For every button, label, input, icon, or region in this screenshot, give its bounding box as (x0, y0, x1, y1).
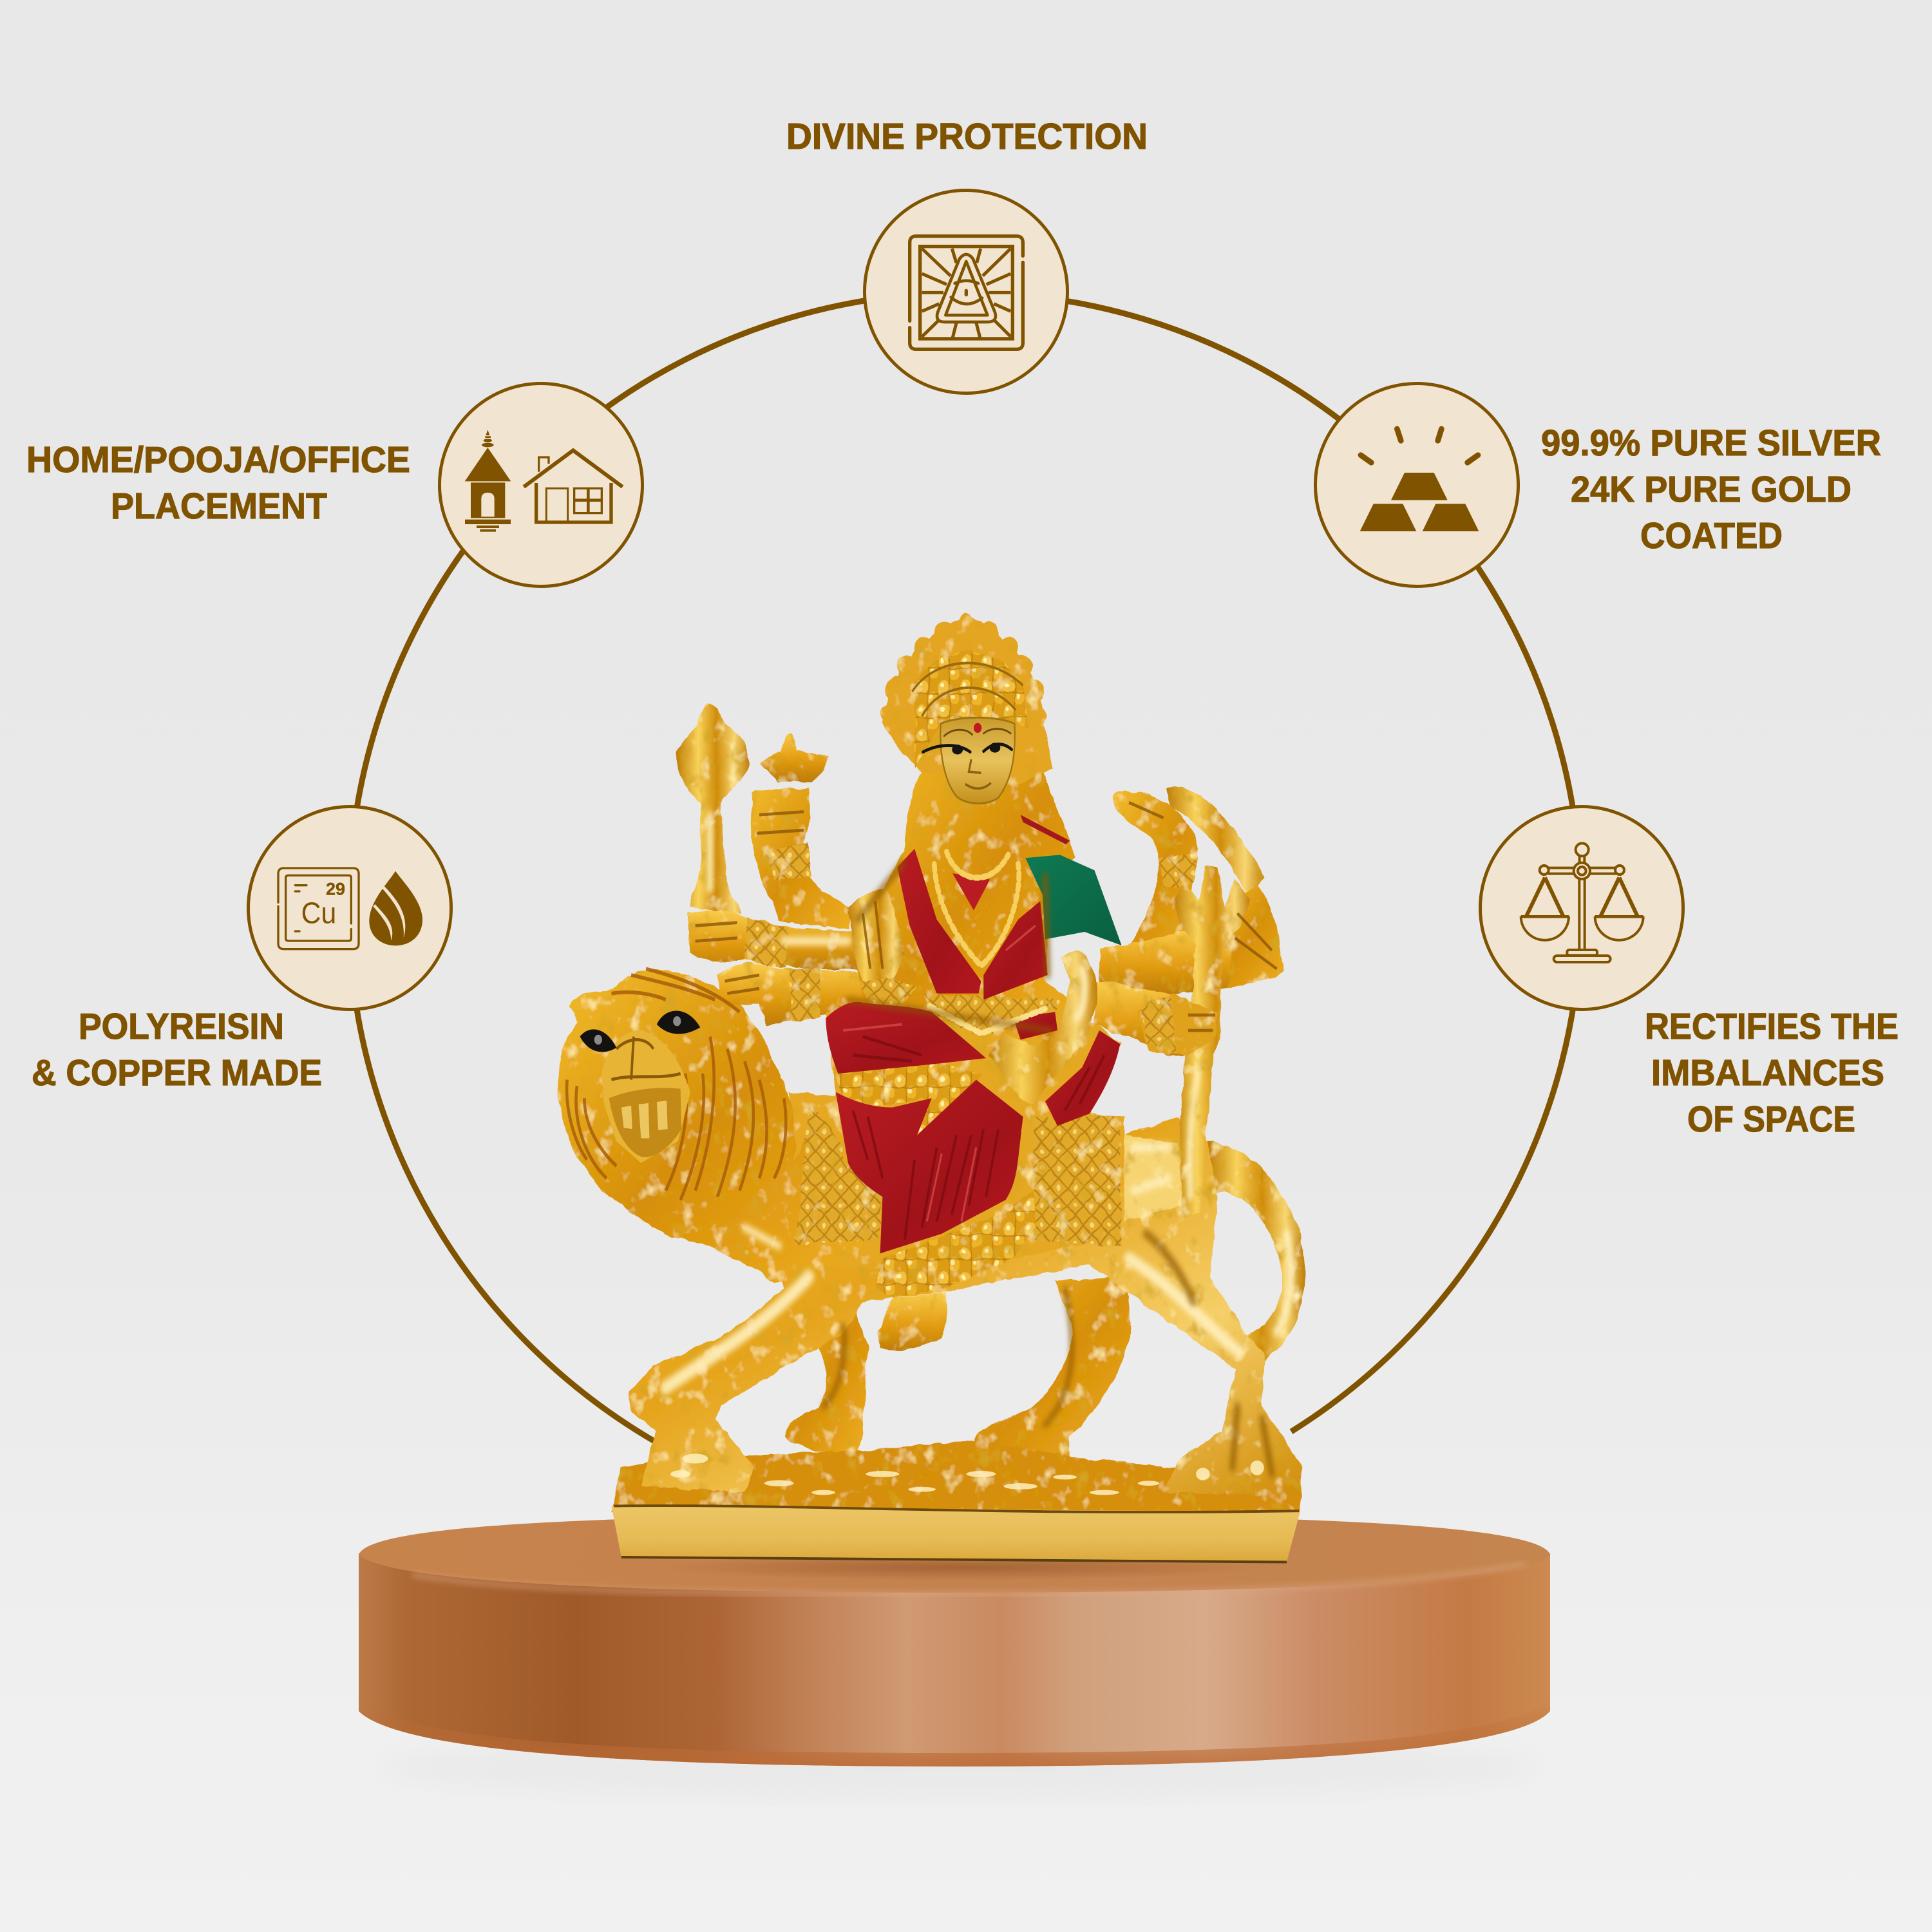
lower hand on trident (1137, 994, 1218, 1055)
arm bangles (744, 842, 1198, 1054)
icon badge: copper element and resin drop: 29 (326, 879, 345, 898)
pedestal side (359, 1553, 1550, 1766)
lion mane and head (558, 970, 863, 1283)
lion muzzle (601, 1030, 690, 1163)
heading: placement (26, 439, 410, 527)
heading: rectifies: OF SPACE (1687, 1099, 1855, 1140)
heading: material: POLYREISIN (79, 1006, 284, 1047)
torso and veil (857, 759, 1075, 1037)
saddle hip shine (1124, 1135, 1183, 1222)
heading: purity: 99.9% PURE SILVER (1541, 422, 1881, 464)
right horizontal arm (1099, 929, 1233, 995)
goddess lower underlay (826, 999, 1122, 1298)
heading: divine protection: DIVINE PROTECTION (786, 116, 1148, 157)
saree tail (833, 1061, 981, 1141)
heading: placement: PLACEMENT (111, 486, 327, 527)
pedestal (359, 1515, 1550, 1800)
crown scalloped halo (881, 614, 1052, 784)
heading: material (32, 1006, 322, 1094)
connecting ring (348, 292, 1581, 1442)
heading: rectifies: IMBALANCES (1651, 1052, 1884, 1094)
eyes and brows (923, 729, 1012, 754)
arm holding lamp (751, 787, 851, 929)
gold saree hem (875, 1191, 1036, 1298)
terrain specks (670, 1454, 1264, 1495)
trident (1174, 867, 1250, 1218)
upper right hand (1113, 791, 1199, 975)
lion far fore leg (785, 1302, 867, 1453)
saree red skirt (836, 1080, 1023, 1253)
heading: rectifies (1645, 1006, 1899, 1140)
lion mouth (609, 1088, 681, 1157)
lion far hind leg (974, 1277, 1132, 1461)
pedestal bottom edge (359, 1700, 1550, 1766)
heading: placement: HOME/POOJA/OFFICE (26, 439, 410, 480)
plinth terrain (611, 1440, 1302, 1512)
lion tail (1208, 1140, 1305, 1400)
arm holding mace (688, 911, 863, 970)
icon badge: gold bars (1315, 384, 1519, 586)
blouse right (983, 901, 1048, 999)
saddle cloth right (1016, 1110, 1122, 1246)
blouse left strip (897, 849, 981, 994)
saree border belt (922, 994, 1060, 1037)
saree red right (1045, 1030, 1120, 1126)
lion hind leg and body (629, 1117, 1302, 1495)
pedestal rim highlight (412, 1564, 1526, 1594)
saree red waist (1013, 1012, 1057, 1039)
heading: rectifies: RECTIFIES THE (1645, 1006, 1899, 1047)
icon badge: balance scales (1480, 806, 1683, 1010)
icon badge: copper element and resin drop (249, 806, 451, 1010)
icon badge: temple and house (439, 384, 643, 586)
icon badge: copper element and resin drop: Cu (301, 896, 336, 929)
statue contact shadow (657, 1555, 1262, 1580)
heading: purity: 24K PURE GOLD (1571, 469, 1852, 510)
plinth top edge line (614, 1506, 1299, 1512)
heading: material: & COPPER MADE (32, 1052, 322, 1094)
fist right (1213, 886, 1284, 987)
icon badge: yantra (864, 191, 1068, 393)
green shawl (1025, 855, 1122, 945)
lion torso underlay (789, 1092, 1124, 1302)
lamp (761, 734, 829, 781)
bindi (974, 723, 981, 733)
saree highlights (843, 925, 1036, 1222)
crown inner (914, 652, 1028, 768)
lion nose lines (611, 1037, 681, 1080)
saree red lap (826, 1002, 986, 1074)
heading: purity: COATED (1640, 515, 1783, 556)
bracelet (858, 978, 917, 1010)
pedestal top (359, 1515, 1550, 1593)
statue: goddess on lion (558, 614, 1305, 1562)
scimitar (1166, 786, 1265, 895)
right lower arm (1094, 982, 1220, 1056)
chest jewel red (952, 873, 990, 911)
plinth bottom edge line (621, 1557, 1287, 1562)
finger lines (696, 802, 1277, 1030)
mace (676, 704, 749, 913)
gold body (558, 614, 1305, 1512)
plinth front face (611, 1506, 1300, 1562)
lion mane strands (567, 969, 786, 1200)
lion face (567, 969, 786, 1200)
gold jewelry (929, 852, 1045, 1034)
metal shadows (824, 864, 1272, 1474)
goddess foot (878, 1293, 947, 1352)
front right arm (989, 952, 1097, 1104)
crown details (912, 663, 1023, 716)
face (940, 717, 1015, 804)
blessing hand (848, 890, 905, 981)
arm above lion (717, 963, 875, 1025)
lion eye left (580, 1029, 616, 1052)
shoulder stripe (1021, 815, 1070, 844)
heading: purity (1541, 422, 1881, 556)
saddle cloth left (794, 1101, 882, 1244)
nose and lips (965, 759, 991, 788)
lion eye right (657, 1011, 700, 1034)
saree folds (853, 1037, 1104, 1240)
metal highlights (666, 815, 1291, 1388)
